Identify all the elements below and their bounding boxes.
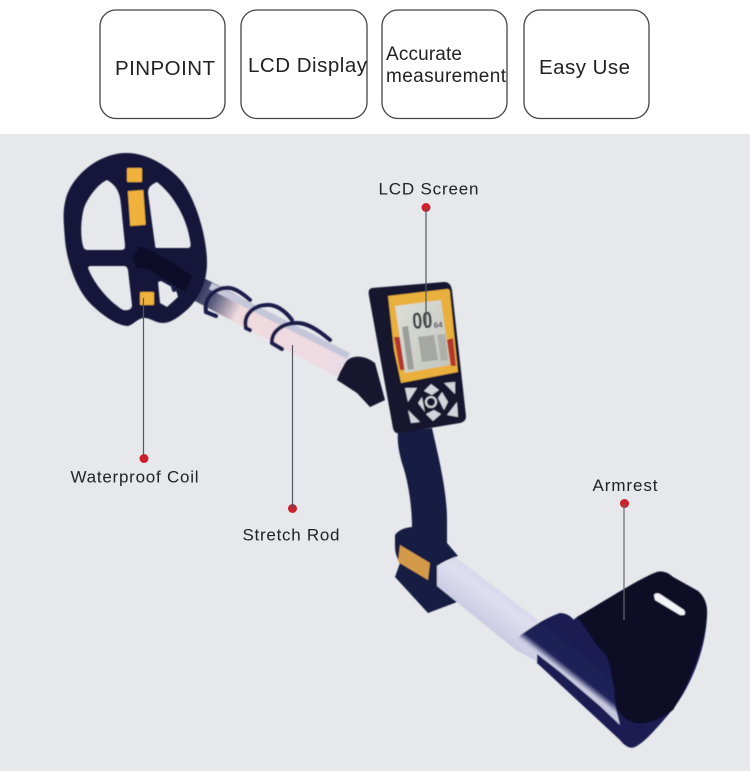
metal detector bbox=[64, 153, 707, 748]
feature: Accurate measurement: measurement bbox=[386, 66, 507, 87]
feature boxes bbox=[100, 10, 649, 118]
control unit bbox=[369, 282, 466, 433]
feature: Accurate measurement: Accurate bbox=[386, 44, 462, 65]
lcd screen bbox=[395, 300, 450, 373]
strap slot bbox=[654, 593, 685, 615]
callout: Armrest: Armrest bbox=[592, 476, 658, 495]
stretch rod bbox=[145, 255, 350, 377]
callout: Armrest bbox=[592, 476, 658, 620]
callout: LCD Screen: LCD Screen bbox=[378, 180, 478, 198]
callout: Stretch Rod: Stretch Rod bbox=[242, 526, 340, 544]
red side stripes bbox=[394, 337, 456, 370]
feature: PINPOINT: PINPOINT bbox=[115, 57, 215, 80]
arm pad bbox=[577, 572, 707, 723]
front flap bbox=[517, 613, 620, 725]
display bezel bbox=[388, 289, 458, 383]
clamp bbox=[337, 357, 385, 407]
callout: Stretch Rod bbox=[242, 345, 340, 544]
coil labels bbox=[127, 168, 154, 305]
callout: LCD Screen bbox=[378, 180, 478, 328]
search coil bbox=[64, 153, 207, 326]
control unit: 64 bbox=[433, 320, 444, 330]
coil mount bbox=[132, 246, 192, 292]
callout: Waterproof Coil bbox=[70, 298, 198, 486]
feature: Accurate measurement bbox=[382, 10, 507, 118]
rod clips bbox=[173, 275, 330, 349]
lower tube bbox=[437, 557, 538, 662]
keypad bbox=[405, 382, 458, 423]
lcd side bars bbox=[402, 326, 414, 370]
grip handle bbox=[395, 428, 458, 613]
feature: Easy Use: Easy Use bbox=[539, 56, 630, 79]
armrest bbox=[517, 572, 707, 748]
feature: LCD Display: LCD Display bbox=[248, 54, 368, 77]
lcd reading: 00 bbox=[411, 306, 433, 334]
feature: PINPOINT bbox=[100, 10, 225, 118]
grip label bbox=[398, 545, 430, 580]
feature: Easy Use bbox=[524, 10, 649, 118]
callout: Waterproof Coil: Waterproof Coil bbox=[70, 468, 198, 486]
feature: LCD Display bbox=[241, 10, 368, 118]
